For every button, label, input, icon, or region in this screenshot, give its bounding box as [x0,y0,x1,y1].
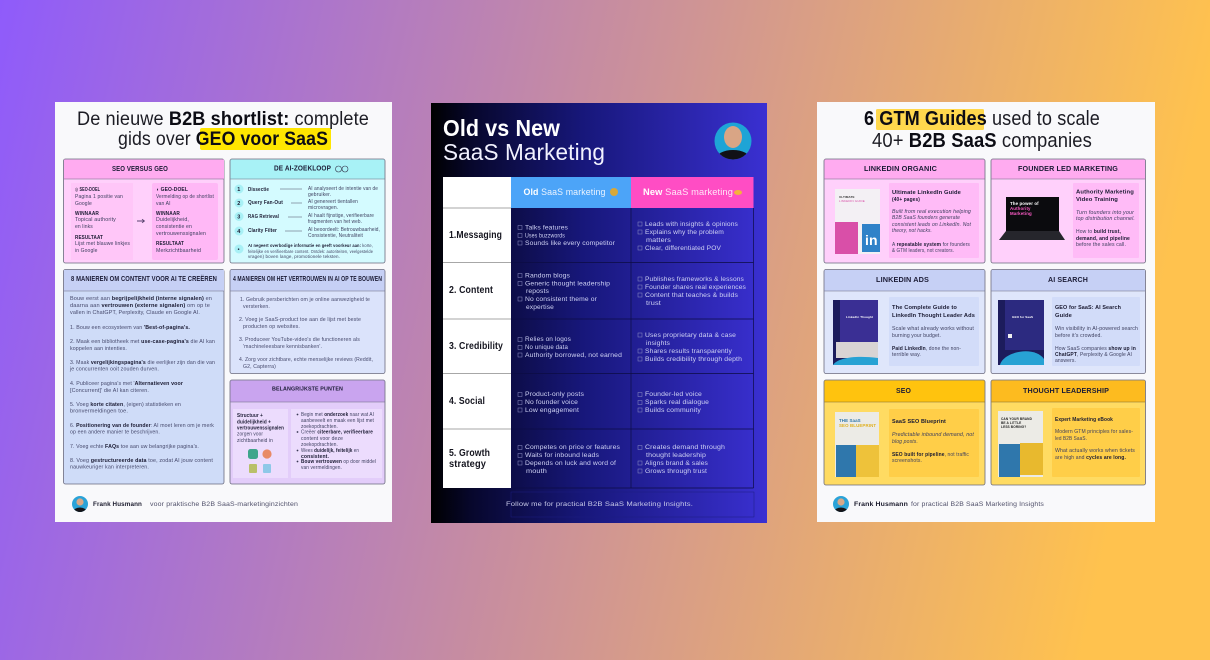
steps: feitelijke en verifieerbare content. Ontdek: autoriteiten, veelgestelde [248,249,374,254]
SEO column: Topical authority [75,217,116,223]
list text: 4. Publiceer pagina's met 'Alternatieven voor [70,381,184,387]
new column items: Leads with insights & opinions [645,221,739,228]
old column items: No unique data [525,344,568,351]
guide text: GEO for SaaS: AI Search [1055,305,1122,311]
bullets: consistent. [301,454,329,460]
title highlight [200,128,331,150]
steps: vragen) boven lange, promotionele teksten. [248,254,340,259]
new column items: Aligns brand & sales [645,460,709,467]
old column items: Generic thought leadership [525,280,610,288]
old column items: expertise [526,304,554,311]
column headers: New SaaS marketing [643,187,733,197]
new column items: Clear, differentiated POV [645,245,722,252]
new column items [638,221,747,475]
footer: author [72,496,298,512]
new column items: matters [646,237,672,244]
footer: author [833,496,1044,512]
new column items: Content that teaches & builds [645,292,739,299]
guide text: demand, and pipeline [1076,236,1130,242]
list text: nauwkeuriger kan interpreteren. [70,464,149,470]
guide text: are high and cycles are long. [1055,455,1126,461]
book: SEO blueprint: THE SaaS [839,418,861,423]
SEO column: Lijst met blauwe linkjes [75,241,130,247]
old column items: Product-only posts [525,391,585,398]
guide text: screenshots. [892,458,922,464]
row labels: 3. Credibility [449,341,503,352]
new column items: Grows through trust [645,468,707,475]
guide text: Predictable inbound demand, not [892,432,975,438]
guide text [1076,190,1135,248]
list text: je concurrenten ooit zouden durven. [69,366,159,372]
GEO column: RESULTAAT [156,241,184,247]
new column items: insights [646,340,671,347]
SEO column: Pagina 1 positie van [75,194,123,200]
list text: versterken. [243,304,270,310]
book: LinkedIn guide: ULTIMATE [839,195,855,199]
panel: LinkedIn Ads [824,270,985,374]
old column items [518,224,622,475]
list text: op een andere manier te beschrijven. [70,430,160,436]
book: Expert Marketing eBook [998,411,1043,477]
guide text: Ultimate LinkedIn Guide [892,190,961,196]
list text: 1. Gebruik persberichten om je online aanwezigheid te [240,297,370,303]
panel: Founder Led Marketing [991,159,1146,263]
list text: vallen in ChatGPT, Perplexity, Claude en Google AI. [70,310,200,316]
footer: author: Frank Husmann [93,502,142,508]
guide text: answers. [1055,358,1076,364]
steps: • [238,247,240,253]
guide text: What actually works when tickets [1055,448,1135,454]
guide text: Authority Marketing [1076,190,1134,196]
bullets: Bouw vertrouwen op door middel [301,459,376,465]
guide text: (40+ pages) [892,197,920,203]
guide text: Paid LinkedIn, done the non- [892,346,961,352]
card: Old vs New SaaS Marketing [431,103,767,523]
panel: SEO [824,380,985,485]
summary left [237,413,284,444]
guide text: burning your budget. [892,333,941,339]
GEO column [156,187,214,254]
card: 6 GTM Guides [817,102,1155,522]
steps: 4 [237,229,241,235]
list text: 5. Voeg korte citaten, (eigen) statistieken en [70,402,181,408]
SEO column: in Google [75,248,98,254]
guide text: Scale what already works without [892,326,975,332]
new column items: Explains why the problem [645,229,724,236]
book: LinkedIn guide [835,189,880,254]
steps: Query Fan-Out [248,200,283,206]
title [864,107,1100,152]
avatar [714,122,752,160]
title: 6 GTM Guides used to scale [864,107,1100,130]
title [443,115,605,165]
SEO column [75,187,130,254]
laptop [999,197,1065,240]
book: LinkedIn guide: LINKEDIN GUIDE [839,199,865,203]
panel: LinkedIn Organic: LINKEDIN ORGANIC [864,166,937,173]
panel: Belangrijkste punten: BELANGRIJKSTE PUNTEN [272,386,343,392]
column headers: Old SaaS marketing [524,187,606,197]
row labels: strategy [449,459,486,470]
old column items: Random blogs [525,272,571,280]
new column items: Founder-led voice [645,391,702,398]
footer: author: Frank Husmann [854,502,908,508]
book: Expert Marketing eBook: CAN YOUR BRAND [1001,417,1033,421]
steps: AI analyseert de intentie van de [308,186,378,192]
old column items: No consistent theme or [525,296,598,303]
guide text [892,419,975,464]
title: gids over GEO voor SaaS [118,128,328,150]
book: SEO blueprint: SEO BLUEPRINT [839,423,876,428]
guide text: A repeatable system for founders [892,242,970,248]
guide text: before the sales call. [1076,242,1126,248]
old column items: Competes on price or features [525,444,621,451]
old column items: mouth [526,468,547,475]
SEO column: WINNAAR [75,211,99,217]
list text: koppelen aan intenties. [70,346,127,352]
steps: 1 [237,187,240,193]
guide text: SEO built for pipeline, not traffic [892,452,969,458]
steps: AI haalt fijnstige, verifieerbare [308,213,374,219]
new column items: Founder shares real experiences [645,284,747,291]
book: Expert Marketing eBook: LESS BORING? [1001,425,1026,429]
list text: 8. Voeg gestructureerde data toe, zodat AI jouw content [70,458,213,464]
new column items: trust [646,300,661,307]
book: LinkedIn Ads guide: LinkedIn Thought [846,315,873,319]
summary left: zorgen voor [237,432,263,438]
old column items: Relies on logos [525,336,572,343]
panel: De AI-zoekloop: DE AI-ZOEKLOOP [274,166,331,172]
book: Expert Marketing eBook: BE A LITTLE [1001,421,1021,425]
steps [234,184,380,259]
panel: SEO versus GEO: SEO VERSUS GEO [112,166,168,173]
steps: microvragen. [308,205,338,211]
row labels: 1.Messaging [449,230,502,241]
list text: daarna aan vertrouwen (externe signalen) om op te [70,303,210,309]
panel: LinkedIn Organic [824,159,985,263]
guide text: How SaaS companies show up in [1055,346,1136,352]
SEO column: en links [75,224,93,230]
steps: AI beoordeelt: Betrouwbaarheid, [308,227,380,233]
book: SEO blueprint [835,412,879,477]
guide text: B2B SaaS founders generate [892,215,960,221]
list text [69,296,215,470]
laptop: The power of [1010,201,1039,206]
GEO column: Vermelding op de shortlist [156,194,214,200]
panel: Thought Leadership [991,380,1146,485]
footer: author: voor praktische B2B SaaS-marketinginzichten [150,502,298,508]
card: GEO voor SaaS guide [55,102,392,522]
steps: RAG Retrieval [248,214,279,220]
GEO column: consistentie en [156,224,192,230]
guide text: Win visibility in AI-powered search [1055,326,1138,332]
guide text: How to build trust, [1076,229,1121,235]
steps: Clarity Filter [248,228,277,234]
list text: 2. Maak een bibliotheek met use-case-pagina's die AI kan [70,339,215,345]
guide text: SaaS SEO Blueprint [892,419,946,425]
guide text: before it's crowded. [1055,333,1102,339]
guide text: & GTM leaders, not creators. [892,248,954,254]
new column items: Creates demand through [645,444,725,451]
SEO column: Google [75,201,92,207]
list text: 2. Voeg je SaaS-product toe aan de lijst met beste [239,317,361,323]
guide text [1055,305,1138,364]
new column items: Shares results transparently [645,348,733,355]
old column items: Sounds like every competitor [525,240,616,247]
comparison table [443,177,754,488]
guide text: terrible way. [892,352,921,358]
panel: SEO versus GEO [64,159,224,263]
title: De nieuwe B2B shortlist: complete [77,108,369,130]
panel: De AI-zoekloop [230,159,385,263]
steps: 3 [237,214,240,220]
list text: 4. Zorg voor zichtbare, echte menselijke reviews (Reddit, [239,357,373,363]
guide text: Turn founders into your [1076,210,1134,216]
guide text: LinkedIn Thought Leader Ads [892,313,975,319]
list text: 'machineleesbare kennisbanken'. [243,344,322,350]
GEO column: WINNAAR [156,211,180,217]
footer note [506,492,754,517]
list text [239,297,373,370]
SEO column: RESULTAAT [75,235,103,241]
SEO column: ◎ SEO-DOEL [75,187,100,193]
old column items: Authority borrowed, not earned [525,352,622,359]
GEO column: ◖ GEO-DOEL [156,187,188,193]
steps: fragmenten van het web. [308,219,362,225]
panel: 4 manieren: 4 MANIEREN OM HET VERTROUWEN IN AI OP TE BOUWEN [233,276,382,283]
old column items: No founder voice [525,399,578,406]
bullets: Wees duidelijk, feitelijk en [301,448,359,454]
GEO column: Duidelijkheid, [156,217,189,223]
steps: Dissectie [248,187,269,193]
summary left: vertrouwenssignalen [237,426,284,432]
column headers [524,187,742,197]
list text: Bouw eerst aan begrijpelijkheid (interne signalen) en [70,296,212,302]
book: LinkedIn Ads guide [833,300,878,365]
title highlight [876,109,984,130]
guide text: Expert Marketing eBook [1055,417,1113,423]
bullets: Creëer citeerbare, verifieerbare [301,430,373,436]
icons: AI tools [248,449,272,473]
old column items: Uses buzzwords [525,232,566,240]
guide text: blog posts. [892,439,918,445]
list text: 1. Bouw een ecosysteem van 'Best-of-pagina's. [70,325,190,331]
list text: 3. Produceer YouTube-video's die functioneren als [239,337,360,343]
title: SaaS Marketing [443,139,605,165]
steps: AI negeert overbodige informatie en geeft voorkeur aan: korte, [248,243,373,248]
icon: infinity [336,166,348,172]
summary left: zichtbaarheid in [237,438,273,444]
panel: 8 manieren: 8 MANIEREN OM CONTENT VOOR AI TE CREËREN [71,275,217,283]
row labels: 4. Social [449,396,485,407]
panel: 4 manieren [230,270,385,374]
panel: LinkedIn Ads: LINKEDIN ADS [876,277,929,284]
new column items: Builds credibility through depth [645,356,742,363]
guide text: Modern GTM principles for sales- [1055,429,1133,435]
new column items: Builds community [645,407,702,414]
arrow [137,219,144,223]
guide text [892,305,975,358]
bullets: van vermeldingen. [301,465,342,471]
old column items: Low engagement [525,407,579,414]
book: LinkedIn guide: in [865,232,878,248]
steps: gebruiker. [308,192,331,198]
bullets [297,412,376,471]
summary left: Structuur + [237,413,263,419]
guide text: Built from real execution helping [892,209,971,215]
book: AI Search guide [998,300,1044,365]
new column items: Publishes frameworks & lessons [645,276,745,283]
title: 40+ B2B SaaS companies [872,129,1092,152]
guide text: The Complete Guide to [892,305,958,311]
summary left: duidelijkheid + [237,420,271,426]
list text: 3. Maak vergelijkingspagina's die eerlijker zijn dan die van [70,360,215,366]
guide text [1055,417,1135,461]
list text: [Concurrent]' die AI kan citeren. [70,388,149,394]
guide text: led B2B SaaS. [1055,436,1087,442]
GEO column: vertrouwenssignalen [156,231,206,237]
bullets: aanbeveelt en maak een lijst met [301,418,374,424]
old column items: Talks features [525,224,569,232]
row labels: 5. Growth [449,448,490,459]
panel: 8 manieren [64,270,224,484]
old column items: Depends on luck and word of [525,460,616,467]
book: AI Search guide: GEO for SaaS [1012,315,1033,319]
old column items: Waits for inbound leads [525,452,600,459]
guide text: top distribution channel. [1076,216,1135,222]
panel: AI Search [991,270,1146,374]
row labels: 2. Content [449,285,494,296]
panel: SEO: SEO [896,388,911,395]
panel: Belangrijkste punten [230,380,385,484]
panel: Thought Leadership: THOUGHT LEADERSHIP [1023,388,1109,395]
guide text: consistent leads on LinkedIn. Not [892,222,971,228]
guide text: Guide [1055,313,1072,319]
new column items: Sparks real dialogue [645,399,709,406]
list text: producten op websites. [243,324,300,330]
guide text [892,190,971,254]
laptop: Marketing [1010,211,1032,216]
row labels [449,230,503,470]
panel: AI Search: AI SEARCH [1048,277,1088,284]
steps: AI genereert tientallen [308,199,358,205]
GEO column: Merkzichtbaarheid [156,248,201,254]
guide text: Video Training [1076,197,1118,203]
new column items: Uses proprietary data & case [645,332,736,339]
title: Old vs New [443,115,560,141]
old column items: reposts [526,288,550,295]
steps: 2 [237,201,240,207]
bullets: zoekopdrachten. [301,424,338,430]
panel: Founder Led Marketing: FOUNDER LED MARKETING [1018,166,1118,173]
footer: author: for practical B2B SaaS Marketing Insights [911,502,1044,508]
title [77,108,369,150]
new column items: thought leadership [646,452,706,459]
guide text: ChatGPT, Perplexity & Google AI [1055,352,1132,358]
laptop: Authority [1010,206,1031,211]
footer note: Follow me for practical B2B SaaS Marketing Insights. [506,501,693,508]
bullets: zoekopdrachten. [301,442,338,448]
list text: bronvermeldingen toe. [70,408,128,414]
GEO column: van AI [156,201,171,207]
list text: 6. Positionering van de founder: AI moet leren om je merk [70,423,214,429]
bullets: Begin met onderzoek naar wat AI [301,412,374,418]
guide text: theory, not hacks. [892,228,932,234]
bullets: content voor deze [301,436,343,442]
list text: G2, Capterra) [243,364,276,370]
steps: Consistentie, Neutraliteit [308,233,363,239]
list text: 7. Voeg echte FAQs toe aan uw belangrijke pagina's. [70,444,199,450]
